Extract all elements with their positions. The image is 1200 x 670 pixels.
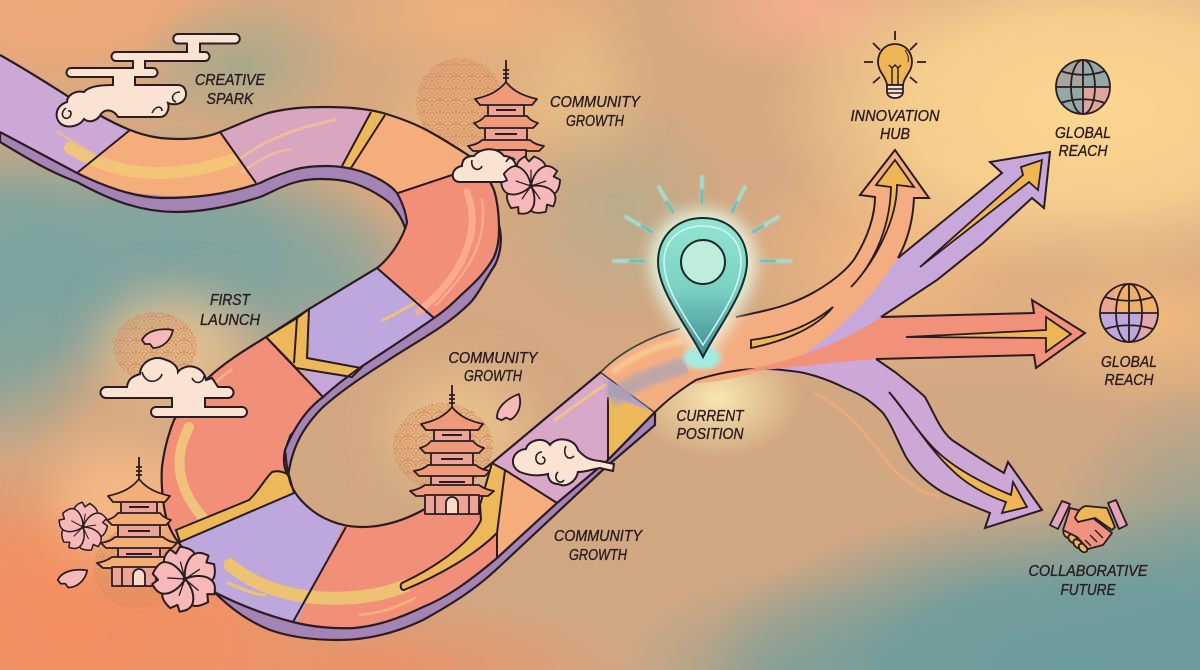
segment: pink lower: [492, 372, 612, 503]
road side band: upper stretch: [0, 125, 412, 232]
segment: coral left: [162, 338, 322, 535]
cloud outline: [57, 34, 240, 126]
label: global reach one: REACH: [1058, 143, 1108, 160]
arrow body: [742, 359, 1042, 528]
road outline: [0, 55, 655, 628]
finger lines: [1085, 530, 1103, 546]
label: community growth top: COMMUNITY: [550, 94, 642, 111]
label: first launch: [200, 292, 261, 329]
road side band: S-turn: [285, 225, 501, 477]
pagoda body stub: [486, 150, 526, 170]
segment: yellow band: [343, 112, 384, 168]
cloud: first launch: [100, 358, 247, 417]
segment: lilac wedge: [301, 370, 330, 396]
pattern circle: first launch: [113, 312, 197, 382]
label: innovation hub: HUB: [880, 126, 910, 143]
label: creative spark: CREATIVE: [195, 72, 266, 89]
segment: lilac start: [0, 56, 128, 172]
segment: lilac middle: [309, 269, 432, 367]
label: global reach two: GLOBAL: [1101, 354, 1157, 371]
pin glow: [650, 210, 756, 365]
icon: light bulb: [864, 31, 926, 98]
orange fade path: [601, 317, 780, 412]
segment: yellow tip: [608, 397, 655, 460]
label: collaborative future: COLLABORATIVE: [1028, 563, 1148, 580]
pin body: [658, 218, 747, 357]
road surface segments: [0, 30, 655, 630]
label: current position: [676, 408, 745, 443]
pale streak: [612, 340, 685, 372]
label: creative spark: [195, 72, 266, 108]
icon: handshake: [1050, 500, 1127, 554]
right cuff: [1108, 500, 1127, 529]
label: community growth top: [550, 94, 642, 130]
cloud: swirl on road: [513, 439, 614, 485]
yellow fingers: [1062, 528, 1089, 554]
pin highlight: [664, 226, 741, 345]
globe fill: [1056, 61, 1110, 113]
label: community growth lower: [554, 528, 644, 564]
flower: lower left small: [52, 498, 114, 558]
pin hole: [681, 240, 725, 284]
segment: coral curve: [378, 176, 498, 316]
segment: lilac lower: [180, 494, 343, 622]
segment: lilac tip: [602, 374, 652, 411]
arrow outline: [876, 300, 1085, 368]
pattern circle: lower left: [93, 528, 177, 608]
road fading into pin: [601, 317, 780, 412]
background glows: [50, 30, 803, 560]
yellow tail stroke: [751, 307, 833, 348]
label: community growth middle: COMMUNITY: [448, 350, 539, 367]
pale orange trail: [814, 393, 940, 497]
arrow outline: [736, 150, 929, 317]
pagoda: lower left: [97, 457, 181, 586]
arrow body: [735, 300, 1085, 372]
label: first launch: LAUNCH: [200, 312, 261, 329]
coral hand: [1063, 508, 1112, 549]
icon: globe one: [1055, 59, 1111, 115]
label: community growth middle: GROWTH: [464, 368, 523, 385]
globe lines: [1100, 284, 1158, 342]
label: global reach one: GLOBAL: [1055, 125, 1111, 142]
segment: coral lower: [293, 500, 500, 630]
label: community growth lower: COMMUNITY: [554, 528, 644, 545]
winding road: [0, 30, 655, 640]
pattern circle: middle: [393, 403, 493, 491]
cloud: by top pagoda: [453, 149, 526, 182]
pattern circle: top: [416, 58, 504, 146]
road streaks: [58, 120, 605, 615]
segment: orange lower: [497, 470, 557, 558]
label: creative spark: SPARK: [206, 91, 254, 108]
arrow: coral to second global reach: [735, 300, 1085, 372]
spirals: [62, 92, 180, 118]
petal: middle: [492, 393, 528, 425]
arrow body: [770, 152, 1050, 372]
segment: orange two: [352, 114, 467, 192]
label: innovation hub: [850, 108, 940, 143]
blue overlay on road end: [608, 380, 655, 410]
pin rays: [614, 177, 790, 261]
label: first launch: FIRST: [210, 292, 251, 309]
label: community growth lower: GROWTH: [569, 547, 628, 564]
arrow body: [680, 150, 929, 384]
arrow outline: [655, 359, 1042, 528]
arrow outline: [881, 152, 1050, 317]
pagoda: middle: [410, 385, 494, 514]
inner yellow arrow: [920, 160, 1042, 267]
yellow hand: [1075, 506, 1115, 530]
pin base glow: [683, 347, 721, 369]
flower: lower left large: [142, 538, 229, 623]
label: collaborative future: FUTURE: [1060, 582, 1116, 599]
inner yellow arrow: [889, 392, 1027, 513]
label: current position: CURRENT: [676, 408, 745, 425]
left cuff: [1050, 501, 1070, 529]
yellow band: upper L: [266, 309, 361, 377]
label: global reach two: REACH: [1104, 372, 1154, 389]
label: global reach two: [1101, 354, 1157, 389]
label: innovation hub: INNOVATION: [850, 108, 940, 125]
globe lines: [1056, 60, 1110, 114]
label: community growth middle: [448, 350, 539, 385]
cloud: creative spark: [57, 34, 240, 126]
location pin: [614, 177, 790, 369]
inner yellow arrow: [851, 160, 914, 287]
spirals: [142, 372, 204, 382]
label: current position: POSITION: [676, 426, 744, 443]
cloud outline: [100, 358, 247, 417]
label: community growth top: GROWTH: [566, 113, 625, 130]
road side band: bottom stretch: [212, 412, 655, 640]
petal: lower left: [58, 570, 87, 588]
arrow: lower purple to collaborative future: [655, 359, 1042, 528]
grey blue streak: [610, 362, 700, 400]
pagoda: top: [468, 60, 544, 151]
road dividers: [77, 112, 655, 622]
arrow: orange to innovation hub: [680, 150, 929, 384]
flower: top: [498, 156, 564, 218]
globe fill: [1100, 285, 1157, 341]
label: global reach one: [1055, 125, 1111, 160]
yellow band: lower swoosh: [401, 463, 505, 590]
swirl body: [513, 439, 614, 485]
segment: pink: [222, 108, 371, 184]
petal: first launch: [142, 329, 173, 348]
icon: globe two: [1099, 283, 1159, 343]
spirals: [536, 446, 574, 482]
yellow band: left swoosh: [176, 471, 294, 542]
arrow: purple to global reach: [770, 152, 1050, 372]
segment: orange: [79, 131, 255, 197]
label: collaborative future: [1028, 563, 1148, 599]
inner yellow arrow: [906, 317, 1071, 352]
thin road line to pin: [601, 328, 682, 372]
